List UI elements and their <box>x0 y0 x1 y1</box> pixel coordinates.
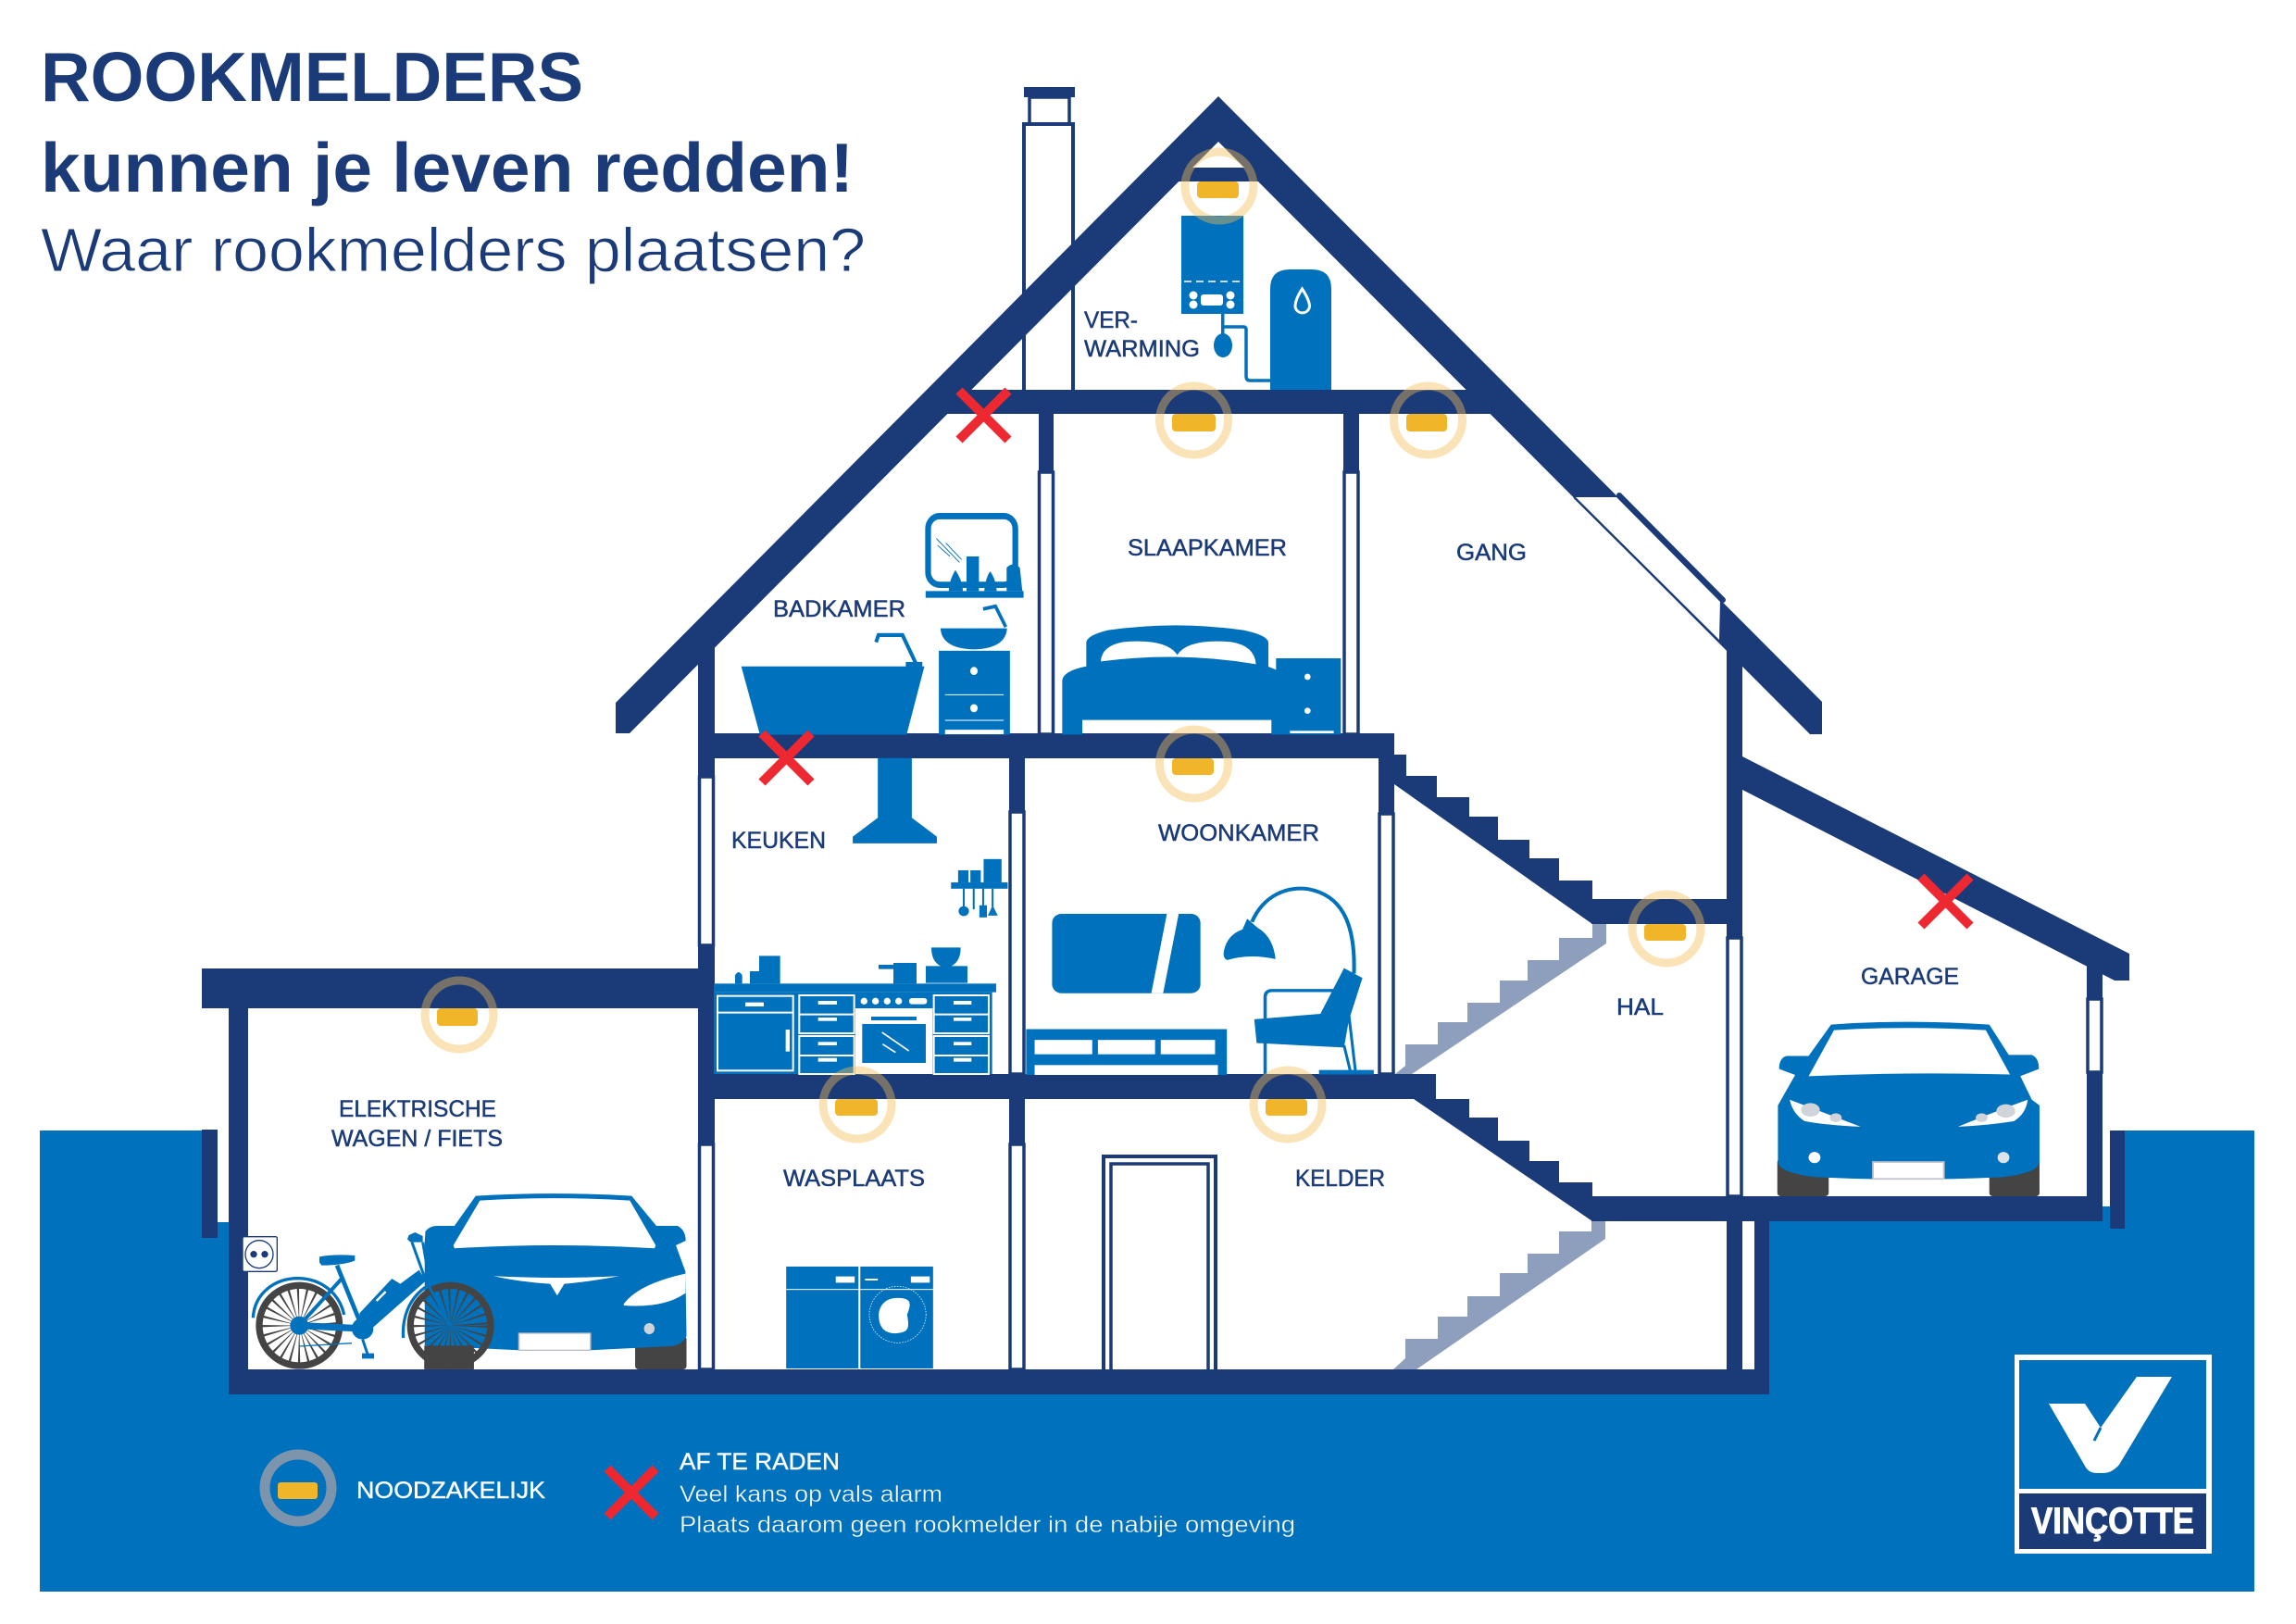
detector: elektrische wagen <box>425 981 493 1049</box>
icon: bathroom mirror <box>926 516 1024 598</box>
icon: bathroom sink cabinet <box>939 606 1010 734</box>
legend: noodzakelijk: NOODZAKELIJK <box>356 1478 545 1504</box>
icon: electric bicycle <box>253 1232 491 1368</box>
icon: garage car <box>1778 1022 2040 1196</box>
icon: bed and nightstand <box>1062 625 1341 734</box>
detector: slaapkamer <box>1159 386 1228 455</box>
detector: hal <box>1632 894 1701 963</box>
red crosses <box>762 391 1970 926</box>
main house floors <box>202 390 2103 1394</box>
door <box>1104 1156 1216 1369</box>
detector: attic <box>1179 152 1259 220</box>
lower stairs light <box>1393 1221 1605 1369</box>
upper stairs light <box>1395 924 1606 1074</box>
roof <box>616 96 1822 734</box>
room labels <box>331 307 1959 1192</box>
cross: keuken ceiling <box>762 733 811 782</box>
wall windows <box>700 472 2102 1369</box>
chimney <box>1024 87 1075 393</box>
label: elektrische wagen / fiets: ELEKTRISCHE <box>339 1096 496 1122</box>
logo: vincotte <box>2015 1355 2212 1554</box>
icon: kitchen shelf <box>951 859 1007 918</box>
lower stairs <box>1414 1099 1592 1221</box>
icon: washing machine and dryer <box>786 1267 933 1368</box>
upper stairs <box>1394 734 1592 924</box>
legend: af te raden: AF TE RADEN <box>680 1449 840 1475</box>
detector: wasplaats <box>823 1070 892 1139</box>
label: elektrische wagen / fiets <box>331 1096 503 1152</box>
icon: armchair <box>1254 968 1374 1074</box>
label: gang: GANG <box>1456 540 1527 566</box>
legend: af te raden: Plaats daarom geen rookmelder in de nabije omgeving <box>680 1512 1295 1538</box>
smoke detector markers <box>425 152 1701 1139</box>
detector: woonkamer <box>1159 730 1228 798</box>
label: garage: GARAGE <box>1861 964 1959 990</box>
label: wasplaats: WASPLAATS <box>783 1166 925 1192</box>
skylight <box>1574 495 1723 642</box>
legend: af te raden: Veel kans op vals alarm <box>680 1481 942 1507</box>
detector: kelder <box>1254 1070 1322 1139</box>
label: woonkamer: WOONKAMER <box>1158 820 1319 846</box>
cross: garage roof <box>1921 877 1970 926</box>
icon: kitchen units <box>714 947 996 1074</box>
cross: badkamer roof <box>959 391 1008 440</box>
icon: bathtub <box>742 635 924 734</box>
icon: power socket <box>243 1237 277 1271</box>
icon: floor lamp <box>1224 889 1354 973</box>
detector: gang <box>1394 386 1463 455</box>
icon: tv unit <box>1026 1030 1227 1075</box>
walls <box>202 414 2125 1371</box>
label: verwarming: WARMING <box>1084 336 1200 362</box>
house structure <box>202 96 2129 1394</box>
label: verwarming: VER- <box>1084 307 1138 333</box>
title: kunnen je leven redden! <box>41 129 854 206</box>
icon: wall painting <box>1052 914 1201 993</box>
legend: af te raden <box>607 1449 1295 1538</box>
label: hal: HAL <box>1616 994 1664 1020</box>
title <box>41 38 866 285</box>
label: badkamer: BADKAMER <box>773 596 905 622</box>
icon: boiler <box>1181 216 1272 381</box>
legend: noodzakelijk <box>265 1455 545 1521</box>
label: kelder: KELDER <box>1295 1166 1385 1192</box>
label: slaapkamer: SLAAPKAMER <box>1128 535 1287 561</box>
icon: cooker hood <box>853 758 937 843</box>
logo: vincotte: VINÇOTTE <box>2031 1501 2194 1542</box>
title: Waar rookmelders plaatsen? <box>41 216 866 285</box>
label: keuken: KEUKEN <box>731 828 826 854</box>
ground <box>40 1131 2254 1592</box>
icon: electric car <box>424 1193 687 1369</box>
garage roof <box>1742 756 2129 981</box>
label: elektrische wagen / fiets: WAGEN / FIETS <box>331 1126 503 1152</box>
title: ROOKMELDERS <box>41 38 583 116</box>
icon: water tank <box>1270 269 1331 390</box>
label: verwarming <box>1084 307 1200 362</box>
